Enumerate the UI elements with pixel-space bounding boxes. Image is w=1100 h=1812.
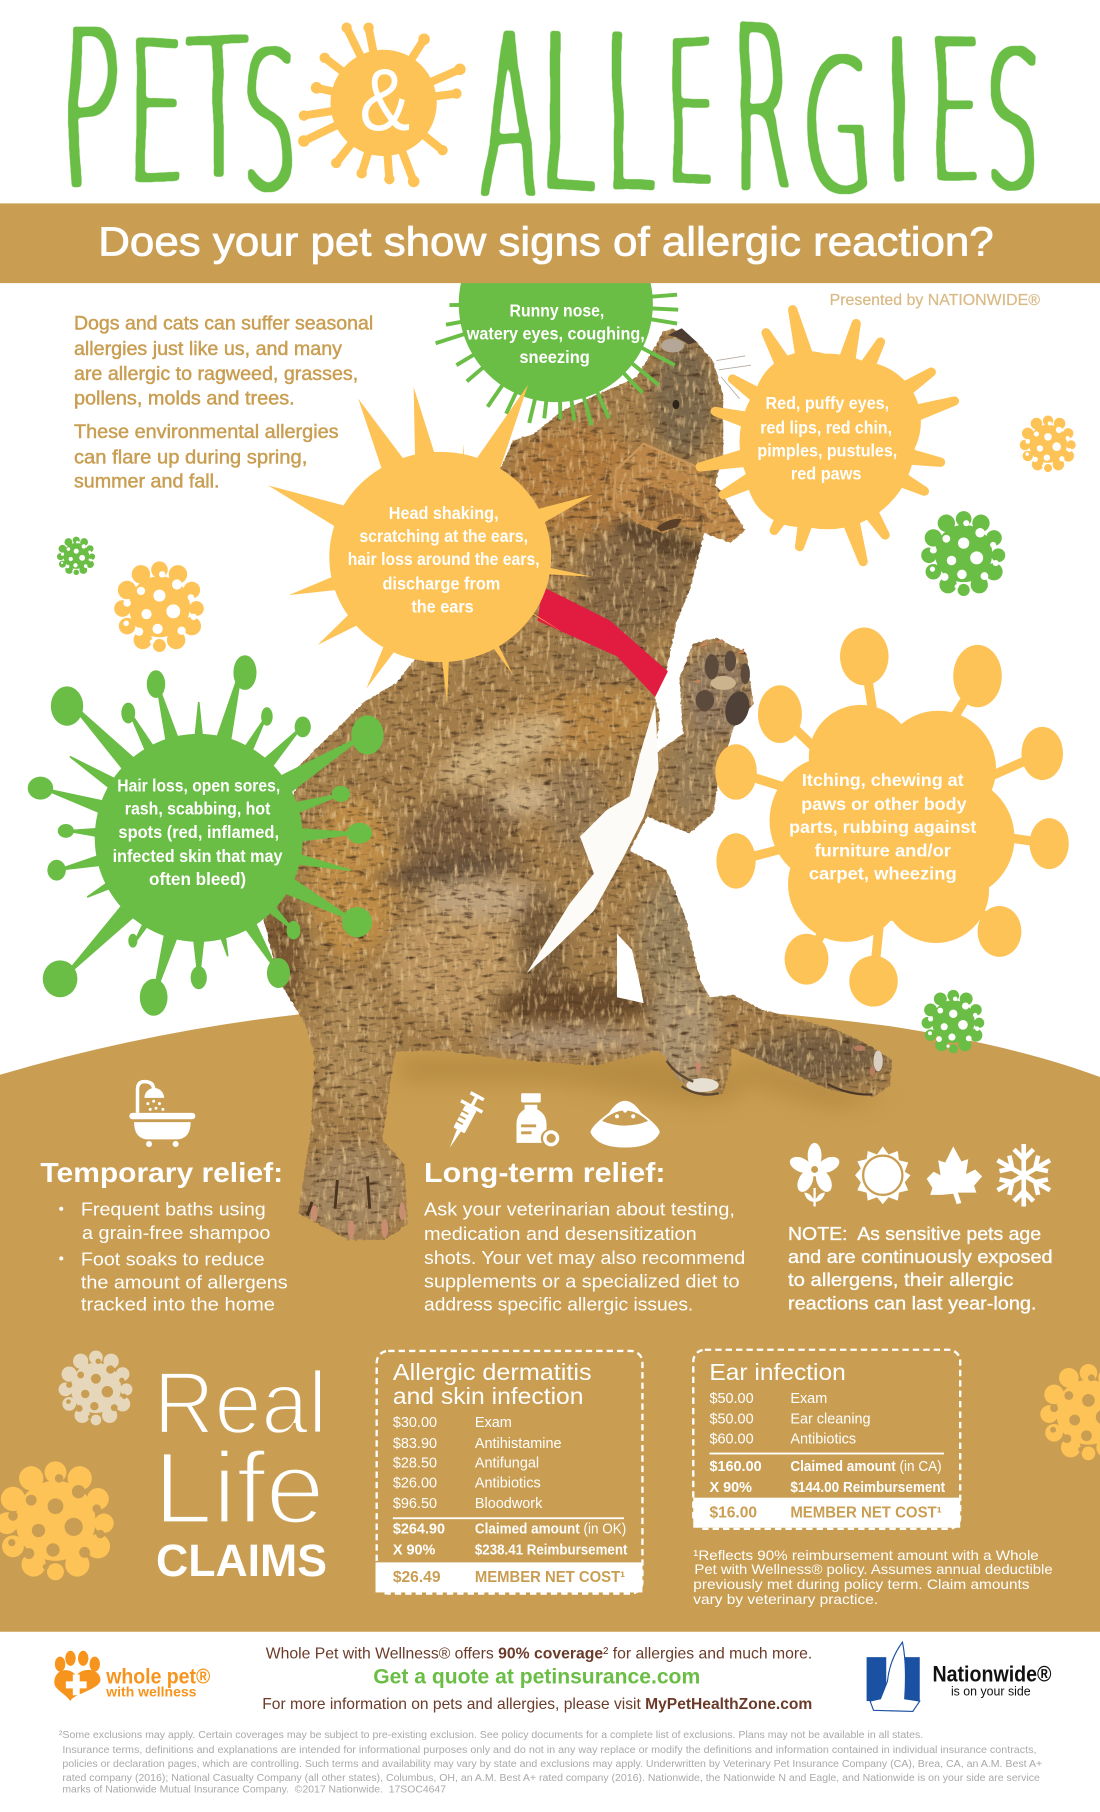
icon: allergen splat with ampersand: &	[359, 52, 410, 149]
shadow under dog	[399, 1054, 890, 1107]
icon: allergen splat with ampersand	[298, 23, 466, 187]
panel: claim allergic dermatitis	[376, 1351, 642, 1594]
hind foot toes	[827, 1045, 883, 1094]
note text: and are continuously exposed	[788, 1246, 1053, 1267]
bubble: head shaking (sun)	[268, 385, 593, 704]
title word: ALLERGIES: S	[985, 12, 1041, 235]
bubble: itching (yellow virus): carpet, wheezing	[809, 863, 957, 883]
panel: claim allergic dermatitis: MEMBER NET COST¹	[475, 1569, 625, 1586]
title word: PETS: T	[186, 0, 248, 223]
bubble: head shaking (sun): the ears	[411, 596, 474, 616]
title word: PETS: E	[128, 0, 184, 228]
panel: claim allergic dermatitis: $264.90	[393, 1521, 445, 1537]
panel: claim allergic dermatitis: and skin infection	[393, 1383, 584, 1409]
bubble: red puffy eyes: red lips, red chin,	[760, 417, 892, 437]
presented by: Presented by NATIONWIDE®	[830, 292, 1040, 309]
long-term relief text: address specific allergic issues.	[424, 1293, 693, 1314]
temporary relief list: Foot soaks to reduce	[81, 1248, 265, 1269]
panel: claim ear infection: Claimed amount (in CA)	[790, 1459, 942, 1475]
panel: claim allergic dermatitis: $28.50	[393, 1456, 437, 1472]
dog ear	[614, 444, 745, 543]
icon: food bowl	[590, 1101, 660, 1148]
long-term relief text	[424, 1199, 745, 1314]
bubble: itching (yellow virus): Itching, chewing at	[802, 770, 964, 790]
heading: real life claims: Real	[154, 1353, 327, 1452]
bubble: runny nose (top, green)	[436, 206, 678, 425]
panel: claim allergic dermatitis: Allergic dermatitis	[393, 1359, 592, 1385]
bubble: itching (yellow virus)	[715, 627, 1069, 1007]
panel: claim allergic dermatitis: Antihistamine	[475, 1436, 562, 1452]
bubble: hair loss (green splat): often bleed)	[149, 869, 246, 889]
panel: claim allergic dermatitis: $26.49	[393, 1569, 441, 1586]
panel: claim allergic dermatitis: $238.41 Reimbursement	[475, 1542, 628, 1558]
panel: claim ear infection: $144.00 Reimbursement	[790, 1480, 945, 1496]
logo: nationwide	[867, 1642, 1051, 1711]
intro text: can flare up during spring,	[74, 447, 307, 468]
panel: claim ear infection: Exam	[790, 1391, 827, 1407]
claims footnote: previously met during policy term. Claim amounts	[693, 1577, 1030, 1593]
title word: PETS: S	[243, 12, 298, 235]
legal fine print: ²Some exclusions may apply. Certain coverages may be subject to pre-existing exclusion. See policy documents for a complete list of exclusions. Plans may not be available in all states.	[59, 1730, 923, 1741]
intro text: Dogs and cats can suffer seasonal	[74, 313, 373, 334]
dog eye	[672, 400, 679, 409]
heading: long-term relief: Long-term relief:	[424, 1157, 666, 1188]
bubble: itching (yellow virus): parts, rubbing against	[789, 817, 976, 837]
bubble: head shaking (sun): Head shaking,	[389, 503, 499, 523]
temporary relief list: tracked into the home	[81, 1293, 275, 1314]
legal fine print	[59, 1730, 1042, 1795]
raised paw pads	[692, 639, 753, 728]
panel: claim ear infection: Antibiotics	[790, 1431, 856, 1447]
shadow beneath ear	[613, 520, 702, 566]
bubble: runny nose (top, green): watery eyes, coughing,	[466, 324, 645, 344]
allergen particles	[0, 415, 1100, 1580]
legal fine print: Insurance terms, definitions and explanations are intended for informational purposes only and do not in any way replace or modify the definitions and information contained in individual insurance contracts,	[62, 1745, 1036, 1756]
note text: NOTE: As sensitive pets age	[788, 1223, 1041, 1244]
bubble: hair loss (green splat): spots (red, inflamed,	[118, 822, 279, 842]
claims footnote: vary by veterinary practice.	[693, 1592, 878, 1608]
panel: claim ear infection: $50.00	[709, 1412, 754, 1428]
panel: claim allergic dermatitis: X 90%	[393, 1542, 436, 1558]
icon: maple leaf	[927, 1146, 982, 1204]
bubble: hair loss (green splat): rash, scabbing, hot	[125, 799, 270, 819]
panel: claim ear infection: MEMBER NET COST¹	[790, 1504, 942, 1521]
ear canal	[656, 519, 682, 532]
logo: nationwide: is on your side	[951, 1683, 1031, 1698]
bubble: itching (yellow virus): paws or other body	[801, 794, 967, 814]
panel: claim allergic dermatitis: Exam	[475, 1415, 512, 1431]
bubble: runny nose (top, green): Runny nose,	[510, 301, 604, 321]
footer call to action: Get a quote at petinsurance.com	[373, 1666, 700, 1689]
panel: claim ear infection: X 90%	[709, 1480, 752, 1496]
bubble: red puffy eyes: pimples, pustules,	[757, 440, 897, 460]
logo: whole pet with wellness: whole pet®	[105, 1666, 210, 1689]
panel: claim allergic dermatitis: $30.00	[393, 1415, 437, 1431]
header band: Does your pet show signs of allergic reaction?	[98, 218, 994, 264]
resting paw toes	[307, 1176, 405, 1239]
intro text	[74, 313, 373, 493]
long-term relief text: shots. Your vet may also recommend	[424, 1247, 745, 1268]
intro text: These environmental allergies	[74, 422, 339, 443]
footer call to action: For more information on pets and allergies, please visit MyPetHealthZone.com	[262, 1696, 812, 1713]
bubble: hair loss (green splat): Hair loss, open sores,	[117, 776, 280, 796]
legal fine print: rated company (2016); National Casualty Company (all other states), Columbus, OH, an A.M. Best A+ rated company (2016). Nationwide, the Nationwide N and Eagle, and Nationwide is on your side are service	[62, 1773, 1040, 1784]
panel: claim allergic dermatitis: Claimed amount (in OK)	[475, 1521, 626, 1537]
dog collar	[537, 587, 668, 697]
panel: claim allergic dermatitis: Bloodwork	[475, 1496, 543, 1512]
panel: claim allergic dermatitis: $83.90	[393, 1436, 437, 1452]
footer call to action: Whole Pet with Wellness® offers 90% coverage² for allergies and much more.	[266, 1645, 812, 1662]
bubble: itching (yellow virus): furniture and/or	[815, 840, 951, 860]
icon: medicine bottle	[516, 1093, 559, 1148]
panel: claim allergic dermatitis: $26.00	[393, 1475, 437, 1491]
legal fine print: marks of Nationwide Mutual Insurance Company. ©2017 Nationwide. 17SOC4647	[62, 1784, 446, 1795]
title word: ALLERGIES: E	[665, 0, 717, 227]
logo: nationwide: Nationwide®	[932, 1661, 1051, 1686]
logo: whole pet with wellness	[54, 1651, 210, 1701]
panel: claim ear infection: $160.00	[709, 1459, 762, 1475]
bubble: head shaking (sun): hair loss around the ears,	[348, 549, 540, 569]
claims footnote: Pet with Wellness® policy. Assumes annual deductible	[694, 1562, 1053, 1578]
logo: whole pet with wellness: with wellness	[105, 1683, 197, 1699]
temporary relief list	[59, 1199, 288, 1314]
icon: sun	[855, 1146, 911, 1204]
title word: PETS	[62, 0, 298, 241]
note text	[788, 1223, 1053, 1313]
dog body	[262, 328, 892, 1240]
icon: bathtub	[129, 1082, 195, 1147]
long-term relief text: medication and desensitization	[424, 1223, 697, 1244]
panel: claim ear infection	[693, 1350, 960, 1529]
heading: real life claims: Life	[154, 1431, 325, 1545]
bubble: red puffy eyes: Red, puffy eyes,	[765, 393, 889, 413]
header band	[0, 203, 1100, 283]
footer call to action	[262, 1645, 812, 1713]
note text: reactions can last year-long.	[788, 1292, 1036, 1313]
long-term relief text: supplements or a specialized diet to	[424, 1270, 739, 1291]
ear rim highlight	[614, 444, 697, 504]
temporary relief list: the amount of allergens	[81, 1272, 288, 1293]
claims footnote	[693, 1548, 1053, 1608]
temporary relief list: Frequent baths using	[81, 1199, 266, 1220]
dog coat patches	[262, 341, 886, 1237]
title word: ALLERGIES: E	[929, 0, 980, 227]
panel: tan ground and relief section	[0, 1002, 1100, 1632]
intro text: allergies just like us, and many	[74, 339, 343, 360]
temporary relief list: a grain-free shampoo	[82, 1222, 270, 1243]
title word: ALLERGIES: I	[884, 0, 914, 229]
panel: claim ear infection: Ear cleaning	[790, 1412, 871, 1428]
panel: claim allergic dermatitis: Antifungal	[475, 1456, 539, 1472]
claims footnote: ¹Reflects 90% reimbursement amount with a Whole	[693, 1548, 1039, 1564]
title	[62, 0, 1041, 251]
bubble: hair loss (green splat)	[28, 655, 384, 1016]
bubble: red puffy eyes: red paws	[791, 464, 861, 484]
dog nose	[668, 328, 697, 344]
note text: to allergens, their allergic	[788, 1269, 1013, 1290]
panel: claim ear infection: $16.00	[709, 1504, 757, 1521]
bubble: red puffy eyes	[700, 310, 954, 562]
bubble: head shaking (sun): discharge from	[382, 573, 500, 593]
heading: real life claims	[154, 1353, 327, 1586]
panel: claim ear infection: $60.00	[709, 1431, 754, 1447]
title word: ALLERGIES: G	[805, 20, 871, 233]
bubble: runny nose (top, green): sneezing	[519, 347, 590, 367]
panel: claim ear infection: Ear infection	[709, 1359, 846, 1385]
intro text: pollens, molds and trees.	[74, 388, 295, 409]
front paw toes	[667, 1061, 719, 1095]
intro text: are allergic to ragweed, grasses,	[74, 364, 358, 385]
title word: ALLERGIES	[481, 0, 1041, 251]
heading: temporary relief: Temporary relief:	[40, 1157, 283, 1188]
icon: syringe	[439, 1089, 489, 1153]
panel: claim allergic dermatitis: Antibiotics	[475, 1475, 541, 1491]
bubble: head shaking (sun): scratching at the ears,	[359, 526, 528, 546]
whiskers	[716, 356, 751, 399]
intro text: summer and fall.	[74, 472, 220, 493]
heading: real life claims: CLAIMS	[156, 1535, 327, 1586]
white gap under belly	[617, 934, 644, 1003]
icon: flower	[787, 1143, 842, 1206]
legal fine print: policies or declaration pages, which are controlling. Such terms and availability may vary by state and exclusions may apply. Underwritten by Veterinary Pet Insurance Company (CA), Brea, CA, an A.M. Best A+	[62, 1759, 1042, 1770]
panel: claim allergic dermatitis: $96.50	[393, 1496, 437, 1512]
panel: claim ear infection: $50.00	[709, 1391, 754, 1407]
icon: snowflake	[999, 1146, 1048, 1204]
dog white chest	[527, 704, 659, 973]
long-term relief text: Ask your veterinarian about testing,	[424, 1199, 735, 1220]
bubble: hair loss (green splat): infected skin that may	[113, 846, 283, 866]
